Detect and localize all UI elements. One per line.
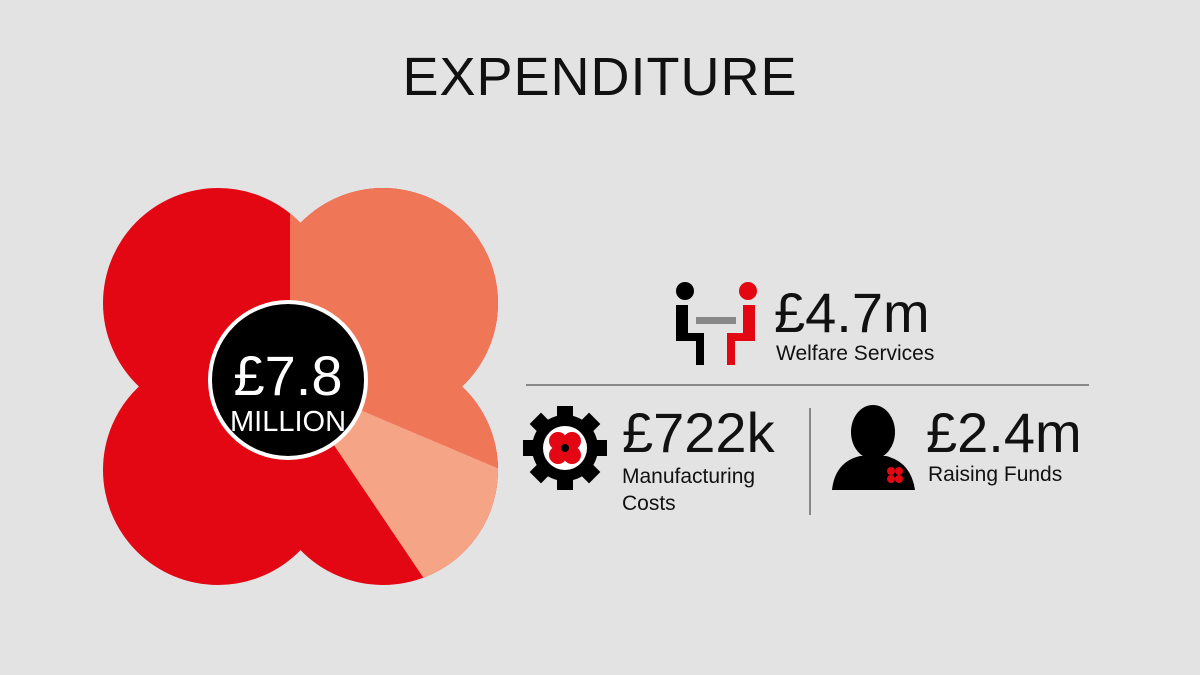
icon: person	[832, 405, 915, 490]
center circle	[210, 302, 366, 458]
icon: welfare meeting	[676, 282, 757, 365]
title: EXPENDITURE	[402, 47, 798, 107]
center circle: £7.8	[234, 344, 342, 407]
chart: poppy pie	[103, 188, 1089, 585]
stat: manufacturing: £722k	[622, 401, 775, 464]
stat: welfare: £4.7m	[774, 281, 930, 344]
text: Welfare Services	[776, 342, 934, 365]
stat: raising funds: £2.4m	[926, 401, 1082, 464]
text: Manufacturing	[622, 465, 755, 488]
text: Raising Funds	[928, 463, 1062, 486]
text: Costs	[622, 492, 676, 515]
dividers	[526, 384, 1089, 386]
icon: gear	[523, 406, 607, 490]
center circle: MILLION	[230, 406, 346, 438]
